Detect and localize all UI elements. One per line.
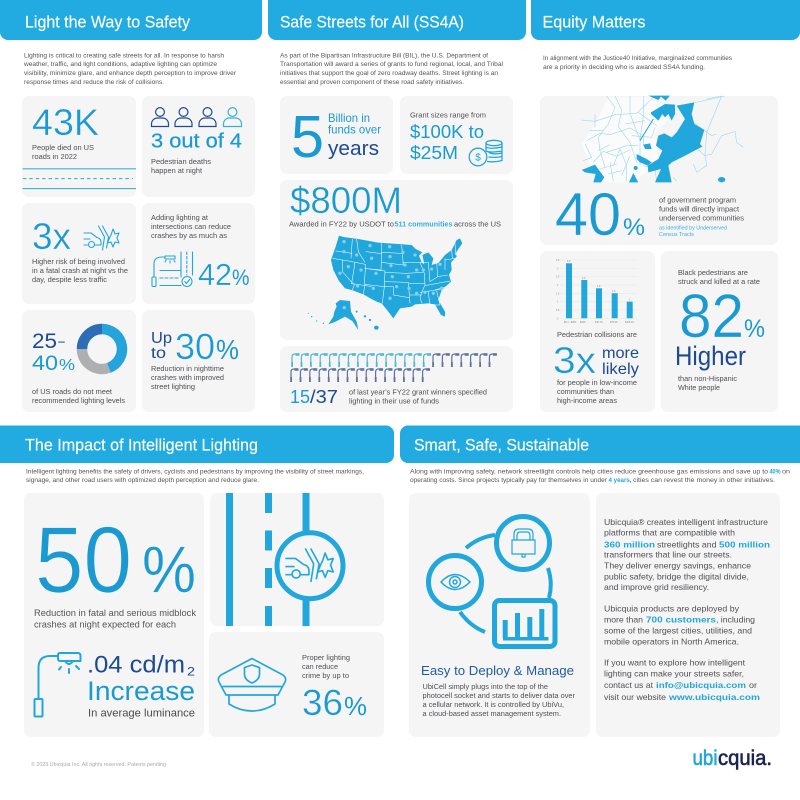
card: 5 billion in funds: years	[328, 138, 379, 160]
card: pedestrian collisions 3x: 3x	[553, 340, 597, 381]
card: 40 percent underserved: 40	[555, 181, 621, 248]
card: 50 percent and luminance: %	[142, 532, 196, 606]
card: 82 percent higher: %	[744, 315, 765, 343]
card: road with crash icon	[210, 493, 384, 626]
text block: lighting intro: weather, traffic, and light conditions, adaptive lighting can optimize	[23, 61, 217, 68]
card: $800M awarded with US map: across the US	[454, 222, 501, 229]
card: 3 out of 4 pedestrian deaths: Pedestrian deaths	[151, 159, 212, 166]
card: 25-40 percent of roads: of US roads do not meet	[32, 389, 112, 396]
text block: smart intro	[410, 468, 790, 484]
card: about Ubicquia: They deliver energy savings, enhance	[604, 561, 751, 571]
card: pedestrian collisions 3x: for people in low-income	[557, 380, 637, 387]
card: 3x higher risk: Higher risk of being involved	[32, 259, 125, 266]
card: about Ubicquia: Ubicquia® creates intelligent infrastructure	[604, 517, 768, 527]
card: about Ubicquia: some of the largest cities, utilities, and	[604, 626, 752, 636]
card: 42 percent at intersections: crashes by as much as	[151, 233, 228, 240]
bar chart: $46.7K-	[595, 321, 604, 324]
card: about Ubicquia: 360 million	[604, 539, 655, 549]
bar chart: 0	[557, 317, 559, 320]
card: 42 percent at intersections: 42	[198, 257, 232, 292]
card: 43K people died: roads in 2022	[32, 154, 77, 161]
heading: Light the Way to Safety	[0, 0, 262, 40]
text block: SS4A intro	[280, 52, 504, 86]
card: 25-40 percent of roads	[22, 310, 136, 412]
text block: impact intro: Intelligent lighting benefits the safety of drivers, cyclists and pedestrians by improving the visibility of street markings,	[26, 468, 364, 476]
heading: Smart, Safe, Sustainable: Smart, Safe, Sustainable	[414, 436, 589, 454]
card: grant sizes	[400, 96, 513, 174]
card: 42 percent at intersections: %	[232, 265, 250, 290]
card: 40 percent underserved: funds will directly impact	[659, 206, 739, 214]
icon: coins: $	[475, 152, 481, 164]
card: 40 percent underserved: %	[623, 214, 645, 241]
text block: smart intro: on	[782, 468, 790, 476]
card: up to 30 percent: Up	[151, 330, 172, 347]
card: 50 percent and luminance: Reduction in fatal and serious midblock	[34, 608, 197, 618]
card: 3 out of 4 pedestrian deaths	[142, 96, 255, 197]
card: 82 percent higher	[661, 251, 778, 412]
card: easy to deploy and manage: Easy to Deploy & Manage	[421, 663, 574, 678]
card: up to 30 percent: to	[151, 345, 166, 362]
card: 42 percent at intersections: intersections can reduce	[151, 224, 231, 231]
card: police cap and crime: crime by up to	[302, 673, 349, 680]
logo: ubicquia: cquia.	[718, 747, 772, 770]
card: about Ubicquia: platforms that are compatible with	[604, 528, 735, 538]
card: 5 billion in funds	[280, 96, 393, 174]
card: 15 of 37 grant winners: lighting in their use of funds	[349, 398, 440, 406]
icon: police cap	[218, 658, 286, 711]
card: up to 30 percent: crashes with improved	[151, 375, 224, 382]
bar chart	[556, 259, 637, 324]
card: 82 percent higher: than non-Hispanic	[678, 376, 738, 383]
card: 50 percent and luminance: 50	[35, 507, 132, 612]
panel: Equity Matters	[531, 0, 800, 412]
card: 25-40 percent of roads: 25	[32, 330, 57, 353]
card: 50 percent and luminance: .04 cd/m	[87, 652, 185, 679]
card: easy to deploy and manage: UbiCell simply plugs into the top of the	[422, 684, 548, 691]
text block: SS4A intro: Transportation will award a series of grants to fund regional, local, and Tribal	[280, 61, 504, 68]
card: easy to deploy and manage	[409, 493, 590, 737]
card: 25-40 percent of roads: -	[57, 330, 66, 353]
heading: Equity Matters	[531, 0, 800, 40]
card: 3 out of 4 pedestrian deaths: happen at night	[151, 168, 202, 175]
card: 43K people died: 43K	[32, 101, 99, 143]
card: 5 billion in funds: Billion in	[328, 111, 370, 125]
heading: The Impact of Intelligent Lighting	[0, 426, 394, 463]
text block: smart intro: operating costs. Since projects typically pay for themselves in under	[410, 477, 608, 484]
card: about Ubicquia: transformers that line our streets.	[604, 550, 732, 560]
bar chart: 3	[557, 267, 559, 270]
card: about Ubicquia: more than	[604, 615, 643, 625]
card: police cap and crime: Proper lighting	[302, 655, 350, 662]
card: 15 of 37 grant winners: of last year’s FY22 grant winners specified	[349, 390, 487, 396]
card: $800M awarded with US map: 511 communities	[394, 220, 452, 229]
bar chart: 1.5	[612, 290, 616, 293]
card: 25-40 percent of roads: 40	[32, 352, 58, 375]
card: about Ubicquia: If you want to explore how intelligent	[604, 658, 746, 668]
bar chart: 1.5	[556, 292, 560, 295]
bar chart: 3.3	[567, 260, 571, 263]
card: 50 percent and luminance: Increase	[87, 676, 195, 706]
donut chart	[82, 329, 122, 369]
text block: lighting intro: Lighting is critical to creating safe streets for all. In response to harsh	[24, 52, 224, 60]
text block: smart intro: Along with improving safety, network streetlight controls help cities reduce greenhouse gas emissions and save up to	[410, 468, 768, 476]
card: 15 of 37 grant winners: /37	[310, 387, 338, 407]
text block: lighting intro: visibility, minimize glare, and enhance depth perception to improve driver	[24, 70, 237, 77]
card: 25-40 percent of roads: recommended lighting levels	[32, 398, 126, 405]
card: up to 30 percent: %	[216, 334, 239, 365]
text block: smart intro: 4 years,	[608, 477, 632, 484]
card: 15 of 37 grant winners: 15	[290, 387, 310, 407]
card: 82 percent higher: White people	[678, 385, 720, 392]
bar chart: $75.9K-	[610, 321, 619, 324]
card: 82 percent higher: Black pedestrians are	[678, 270, 748, 277]
card: 3 out of 4 pedestrian deaths: 3 out of 4	[151, 130, 242, 152]
card: about Ubicquia: streetlights and	[657, 539, 717, 549]
card: 43K people died: People died on US	[32, 145, 94, 152]
card: police cap and crime: 36	[302, 682, 343, 723]
text block: SS4A intro: essential and proven component of these road safety initiatives.	[280, 79, 464, 86]
card: 50 percent and luminance: crashes at night expected for each	[34, 620, 176, 630]
card: about Ubicquia: 700 customers	[646, 615, 716, 625]
bar chart: 1.8	[597, 285, 601, 288]
text block: equity intro: are a priority in deciding who is awarded SS4A funding.	[543, 64, 705, 71]
map: census tracts	[581, 96, 743, 182]
card: pedestrian collisions 3x: Pedestrian collisions are	[557, 332, 637, 339]
logo: ubicquia	[692, 747, 772, 770]
card: about Ubicquia: Ubicquia products are deployed by	[604, 603, 740, 613]
card: 82 percent higher: struck and killed at a rate	[678, 279, 760, 286]
card: 3x higher risk	[22, 203, 136, 304]
bar chart: 1	[557, 301, 559, 304]
card: 5 billion in funds: 5	[291, 104, 324, 170]
text block: lighting intro	[23, 52, 237, 86]
card: 82 percent higher: Higher	[675, 341, 746, 371]
card: $800M awarded with US map: $800M	[290, 180, 402, 221]
bar chart: 2	[557, 284, 559, 287]
card: easy to deploy and manage: a cellular network. It is controlled by UbiVu,	[422, 702, 564, 709]
card: 42 percent at intersections	[142, 203, 255, 304]
card: police cap and crime: can reduce	[302, 664, 338, 671]
card: about Ubicquia: visit our website	[604, 692, 666, 702]
card: up to 30 percent: 30	[175, 326, 215, 367]
bar chart: 3.5	[556, 259, 560, 262]
card: grant sizes: $25M	[410, 142, 458, 163]
bar chart: $0.1 - $26K	[564, 321, 577, 324]
card: pedestrian collisions 3x	[540, 251, 655, 412]
card: 40 percent underserved: Census Tracts	[659, 232, 694, 238]
icon: car crash	[84, 226, 119, 250]
card: 40 percent underserved: as identified by Underserved	[659, 226, 727, 232]
card: pedestrian collisions 3x: high-income areas	[557, 398, 618, 405]
text block: impact intro: signage, and other road users with optimized depth perception and reduce glare.	[26, 477, 259, 484]
card: up to 30 percent: street lighting	[151, 384, 195, 391]
card: up to 30 percent	[142, 310, 255, 412]
card: 3x higher risk: 3x	[32, 216, 71, 257]
text block: lighting intro: response times and reduce the risk of collisions.	[24, 79, 164, 86]
card: up to 30 percent: Reduction in nighttime	[151, 366, 224, 373]
icon row: street lights	[290, 354, 498, 380]
bar chart: 2.5	[556, 276, 560, 279]
text block: SS4A intro: initiatives that support the goal of zero roadway deaths. Street lighting is an	[280, 70, 498, 77]
icon: street lamp	[34, 653, 80, 716]
card: about Ubicquia: 500 million	[719, 539, 770, 549]
card: easy to deploy and manage: photocell socket and starts to deliver data over	[422, 693, 576, 700]
heading: Safe Streets for All (SS4A)	[268, 0, 526, 40]
card: about Ubicquia	[596, 493, 780, 737]
card: pedestrian collisions 3x: likely	[602, 361, 639, 378]
text block: equity intro	[543, 55, 733, 71]
card: 43K people died	[22, 96, 136, 197]
card: 40 percent underserved: of government program	[659, 198, 736, 204]
US map	[308, 236, 462, 330]
card: about Ubicquia: and improve grid resiliency.	[604, 582, 709, 592]
card: about Ubicquia: contact us at	[604, 680, 654, 690]
text block: smart intro: cities can revest the money in other initiatives.	[633, 477, 775, 484]
card: pedestrian collisions 3x: communities than	[557, 389, 614, 396]
icon: device, eye and chart cycle	[428, 516, 555, 646]
card: 42 percent at intersections: Adding lighting at	[151, 215, 208, 222]
text block: equity intro: In alignment with the Justice40 Initiative, marginalized communities	[543, 55, 733, 62]
card: grant sizes: Grant sizes range from	[410, 112, 486, 120]
icon: four people	[152, 108, 242, 126]
panel: Smart, Safe, Sustainable	[400, 426, 800, 737]
panel: Safe Streets for All	[268, 0, 526, 412]
card: 40 percent underserved: underserved communities	[659, 216, 745, 222]
bar chart: 1	[629, 298, 631, 302]
card: $800M awarded with US map: Awarded in FY22 by USDOT to	[289, 222, 394, 229]
card: 5 billion in funds: funds over	[328, 122, 381, 136]
bar chart: $105.1K-	[625, 321, 635, 324]
card: about Ubicquia: www.ubicquia.com	[668, 692, 760, 702]
card: easy to deploy and manage: a cloud-based asset management system.	[422, 711, 561, 718]
text block: SS4A intro: As part of the Bipartisan Infrastructure Bill (BIL), the U.S. Department of	[280, 52, 488, 60]
card: pedestrian collisions 3x: more	[602, 345, 639, 362]
icon: crash in circle	[277, 533, 343, 599]
icon: lit intersection	[152, 252, 192, 286]
panel: The Impact of Intelligent Lighting	[0, 426, 394, 737]
heading: Safe Streets for All (SS4A): Safe Streets for All (SS4A)	[280, 14, 464, 32]
card: police cap and crime: %	[344, 691, 367, 721]
card: about Ubicquia: lighting can make your streets safer,	[604, 669, 744, 679]
card: 3x higher risk: day, despite less traffic	[32, 277, 108, 284]
card: $800M awarded with US map	[280, 180, 513, 340]
card: about Ubicquia: mobile operators in North America.	[604, 636, 739, 646]
card: grant sizes: $100K to	[410, 121, 484, 142]
footer: copyright: © 2023 Ubicquia Inc. All rights reserved. Patents pending	[31, 761, 166, 768]
heading: Light the Way to Safety: Light the Way to Safety	[25, 14, 191, 32]
bar chart: 0.5	[556, 309, 560, 312]
bar chart: $26K-	[580, 321, 587, 324]
card: 50 percent and luminance: In average luminance	[88, 708, 195, 720]
card: about Ubicquia: public safety, bridge the digital divide,	[604, 571, 749, 581]
heading: The Impact of Intelligent Lighting: The Impact of Intelligent Lighting	[25, 436, 258, 454]
card: about Ubicquia: , including	[716, 615, 755, 625]
card: 50 percent and luminance: 2	[187, 664, 195, 678]
card: 15 of 37 grant winners	[280, 346, 513, 412]
card: about Ubicquia: or	[749, 680, 757, 690]
card: about Ubicquia: info@ubicquia.com	[656, 680, 746, 690]
card: 50 percent and luminance	[24, 493, 204, 737]
heading: Equity Matters: Equity Matters	[542, 14, 646, 32]
bar chart: 2.3	[582, 277, 586, 280]
card: 3x higher risk: in a fatal crash at night vs the	[32, 268, 128, 275]
card: 40 percent underserved	[540, 96, 778, 248]
heading: Smart, Safe, Sustainable	[400, 426, 800, 463]
text block: smart intro: 40%	[770, 468, 781, 476]
card: 82 percent higher: 82	[679, 282, 744, 350]
card: 25-40 percent of roads: %	[59, 357, 75, 374]
card: police cap and crime	[209, 632, 384, 737]
logo: ubicquia: ubi	[692, 747, 718, 770]
text block: impact intro	[26, 468, 364, 484]
panel: Light the Way to Safety	[0, 0, 262, 412]
